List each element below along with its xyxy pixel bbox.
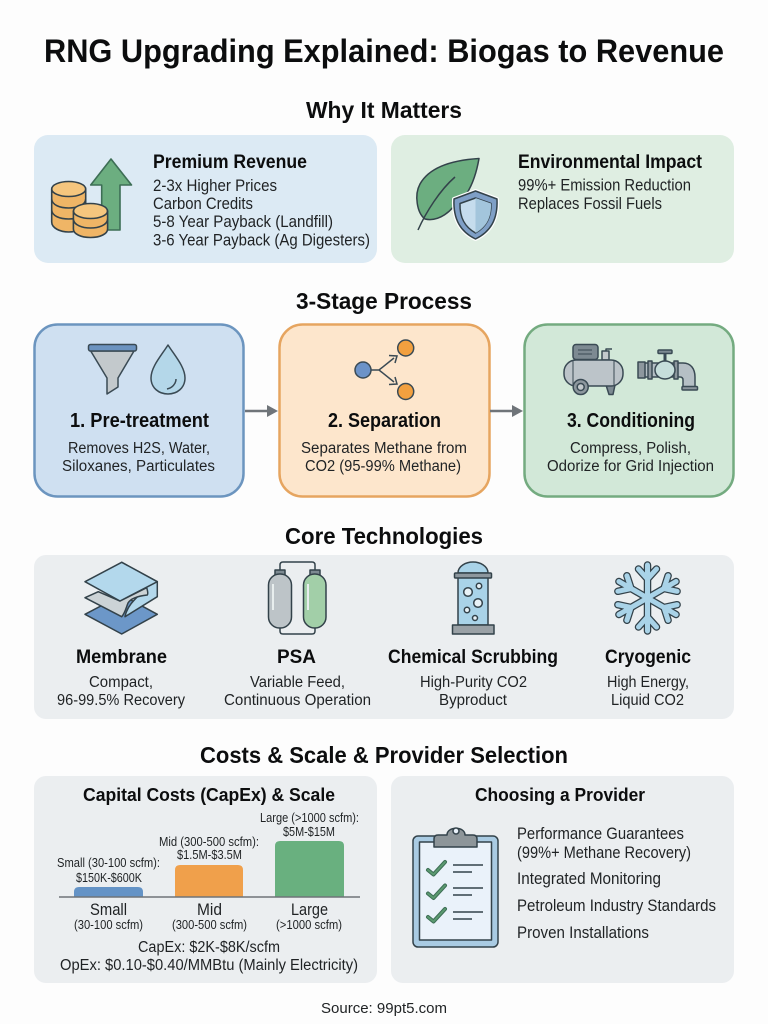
icon: clipboard checklist: [413, 828, 498, 947]
description: High Energy,: [607, 674, 689, 691]
bar chart: capex by scale: [57, 811, 360, 932]
technology: cryogenic: [605, 565, 691, 709]
stage body: [62, 440, 215, 475]
panel: choosing a provider: [391, 776, 734, 983]
selection criteria: Petroleum Industry Standards: [517, 897, 716, 915]
stage heading: 2. Separation: [328, 410, 441, 432]
axis: [59, 896, 360, 898]
title: RNG Upgrading Explained: Biogas to Revenue: [44, 33, 724, 69]
selection criteria: Performance Guarantees: [517, 825, 684, 843]
description: [607, 674, 689, 709]
card body: [518, 176, 691, 213]
description: Byproduct: [439, 692, 508, 709]
card body: 2-3x Higher Prices: [153, 177, 277, 195]
heading: core technologies: Core Technologies: [285, 523, 483, 549]
panel: stage 1 pre-treatment: [34, 324, 244, 496]
heading: why it matters: Why It Matters: [306, 97, 462, 123]
card body: Replaces Fossil Fuels: [518, 195, 662, 213]
icon: membrane layers: [85, 562, 157, 634]
card body: 3-6 Year Payback (Ag Digesters): [153, 232, 370, 250]
cost summary: OpEx: $0.10-$0.40/MMBtu (Mainly Electricity): [60, 957, 358, 974]
selection criteria: [517, 825, 716, 942]
stage body: Compress, Polish,: [570, 440, 691, 457]
label: Chemical Scrubbing: [388, 647, 558, 668]
bar: small: [74, 887, 143, 897]
stage body: Removes H2S, Water,: [68, 440, 210, 457]
stage heading: 1. Pre-treatment: [70, 410, 209, 432]
stage body: [301, 440, 467, 475]
cost summary: CapEx: $2K-$8K/scfm: [138, 939, 280, 956]
icon: compressor and pipe valve: [564, 344, 698, 394]
label: PSA: [277, 647, 316, 668]
description: Compact,: [89, 674, 153, 691]
card body: Carbon Credits: [153, 195, 253, 213]
description: Continuous Operation: [224, 692, 371, 709]
description: Liquid CO2: [611, 692, 684, 709]
panel: core technologies: [34, 555, 734, 719]
category ranges: [74, 918, 342, 932]
selection criteria: Proven Installations: [517, 924, 649, 942]
description: Variable Feed,: [250, 674, 345, 691]
label: Cryogenic: [605, 647, 691, 668]
bar: large: [275, 841, 344, 897]
icon: coins and up arrow: [52, 159, 132, 238]
panel: capital costs and scale: [34, 776, 377, 983]
panel heading: Choosing a Provider: [475, 784, 645, 805]
source line: Source: 99pt5.com: [321, 1000, 447, 1017]
icon: funnel and water drop: [88, 344, 185, 394]
icon: twin adsorption tanks: [268, 562, 326, 634]
category labels: Mid: [197, 901, 222, 919]
panel heading: Capital Costs (CapEx) & Scale: [83, 784, 335, 805]
stage body: Siloxanes, Particulates: [62, 458, 215, 475]
value labels: $150K-$600K: [76, 871, 143, 885]
stage body: Odorize for Grid Injection: [547, 458, 714, 475]
category ranges: (30-100 scfm): [74, 918, 143, 932]
icon: separation nodes: [355, 340, 414, 400]
card body: 99%+ Emission Reduction: [518, 176, 691, 194]
arrow: stage 1 to 2: [245, 405, 278, 417]
value labels: $1.5M-$3.5M: [177, 848, 242, 862]
description: [224, 674, 371, 709]
description: 96-99.5% Recovery: [57, 692, 185, 709]
value labels: Small (30-100 scfm):: [57, 856, 160, 870]
technology: membrane: [57, 562, 185, 709]
value labels: [57, 811, 359, 885]
card heading: Premium Revenue: [153, 152, 307, 173]
arrow: stage 2 to 3: [490, 405, 523, 417]
card body: [153, 177, 370, 250]
value labels: Mid (300-500 scfm):: [159, 835, 259, 849]
selection criteria: (99%+ Methane Recovery): [517, 844, 691, 862]
technology: PSA: [224, 562, 371, 709]
stage body: CO2 (95-99% Methane): [305, 458, 461, 475]
icon: leaf and shield: [417, 158, 497, 239]
stage heading: 3. Conditioning: [567, 410, 695, 432]
panel: environmental impact: [391, 135, 734, 263]
description: [420, 674, 527, 709]
value labels: $5M-$15M: [283, 825, 335, 839]
icon: snowflake: [614, 565, 681, 631]
description: [57, 674, 185, 709]
card heading: Environmental Impact: [518, 152, 703, 173]
category ranges: (300-500 scfm): [172, 918, 247, 932]
panel: stage 3 conditioning: [524, 324, 734, 496]
card body: 5-8 Year Payback (Landfill): [153, 213, 333, 231]
label: Membrane: [76, 647, 167, 668]
description: High-Purity CO2: [420, 674, 527, 691]
panel: premium revenue: [34, 135, 377, 263]
value labels: Large (>1000 scfm):: [260, 811, 359, 825]
bar: mid: [175, 865, 243, 897]
category labels: Small: [90, 901, 127, 919]
heading: costs and provider selection: Costs & Scale & Provider Selection: [200, 742, 568, 768]
icon: scrubbing column: [452, 562, 494, 634]
stage body: [547, 440, 714, 475]
category ranges: (>1000 scfm): [276, 918, 342, 932]
stage body: Separates Methane from: [301, 440, 467, 457]
technology: chemical scrubbing: [388, 562, 558, 709]
panel: stage 2 separation: [280, 324, 490, 496]
cost summary: [60, 939, 358, 974]
selection criteria: Integrated Monitoring: [517, 870, 661, 888]
heading: 3-stage process: 3-Stage Process: [296, 288, 472, 314]
category labels: [90, 901, 328, 919]
category labels: Large: [291, 901, 328, 919]
